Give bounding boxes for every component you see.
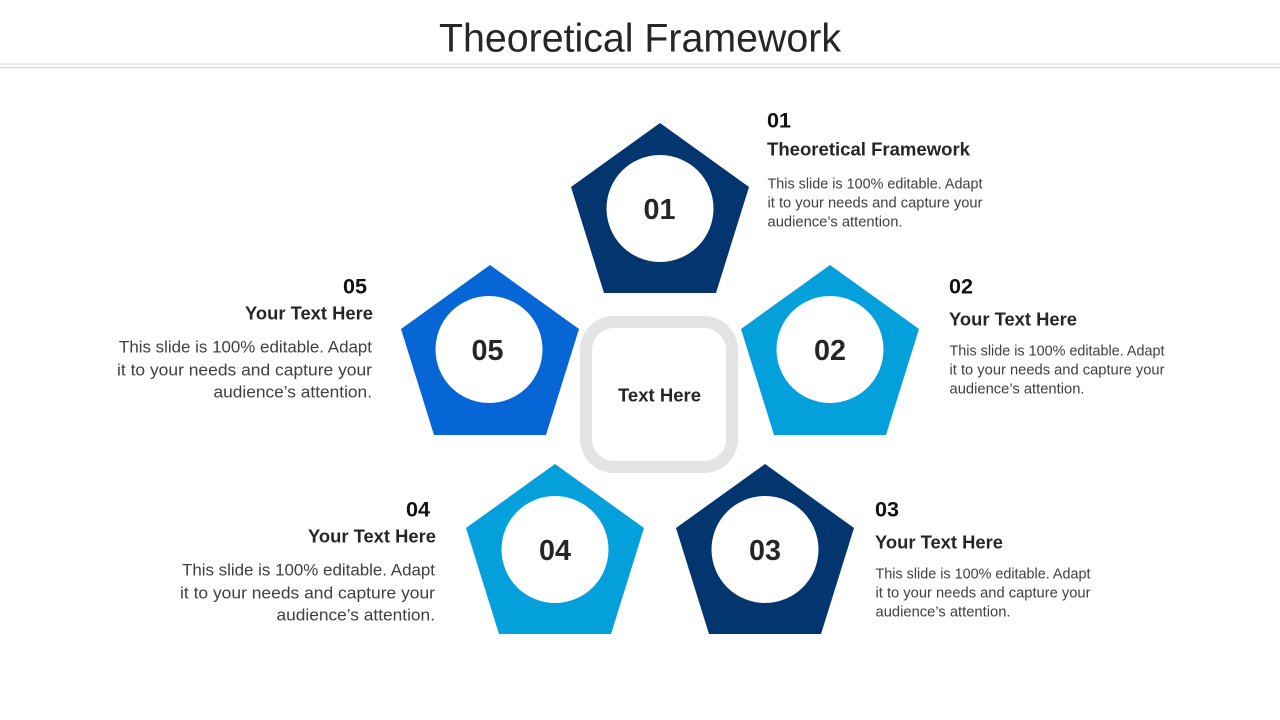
pentagon 05: 05 [472,335,504,367]
text block 02: it to your needs and capture your [950,362,1165,378]
text block 05: it to your needs and capture your [117,360,372,380]
pentagon 05 [401,265,579,435]
text block 04: This slide is 100% editable. Adapt [182,560,435,580]
text block 02: audience’s attention. [950,382,1084,398]
text block 05: audience’s attention. [214,382,372,402]
title: Theoretical Framework [439,16,842,60]
text block 04 [180,498,436,624]
text block 05 [117,276,373,402]
text block 01: 01 [767,110,791,132]
pentagon 01: 01 [644,194,676,226]
pentagon 02 [741,265,919,435]
text block 03: Your Text Here [875,532,1003,552]
text block 01: audience’s attention. [768,214,902,230]
text block 03 [875,498,1091,620]
pentagon 04 [466,464,644,634]
text block 01: This slide is 100% editable. Adapt [768,176,982,192]
text block 04: audience’s attention. [276,606,435,624]
pentagon 04: 04 [539,535,571,567]
text block 05: Your Text Here [245,304,373,324]
text block 01: it to your needs and capture your [768,196,983,212]
text block 05: 05 [343,276,367,298]
text block 03: This slide is 100% editable. Adapt [876,566,1090,582]
text block 03: 03 [875,498,899,522]
pentagon 02: 02 [814,335,846,367]
center box: Text Here [618,386,701,406]
text block 02: 02 [949,276,973,298]
text block 03: it to your needs and capture your [876,586,1091,602]
text block 02: Your Text Here [949,310,1077,330]
center box [586,322,732,467]
pentagon 03: 03 [749,535,781,567]
text block 01: Theoretical Framework [767,140,971,160]
text block 04: it to your needs and capture your [180,584,435,602]
text block 02: This slide is 100% editable. Adapt [950,344,1164,360]
text block 04: Your Text Here [308,526,436,546]
pentagon 01 [571,123,749,293]
text block 05: This slide is 100% editable. Adapt [119,338,372,356]
text block 03: audience’s attention. [876,604,1010,620]
text block 04: 04 [406,498,430,522]
text block 02 [949,276,1165,398]
pentagon 03 [676,464,854,634]
text block 01 [767,110,983,230]
